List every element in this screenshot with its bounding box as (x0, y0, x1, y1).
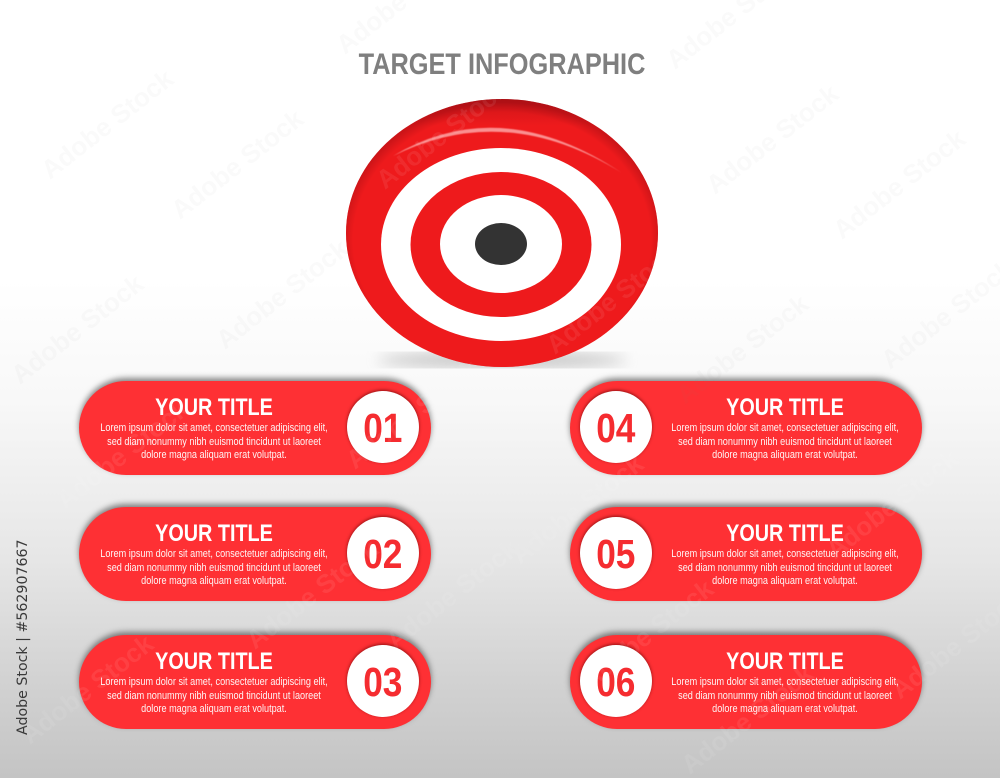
watermark: Adobe Stock (35, 63, 179, 185)
card 05 (570, 507, 922, 601)
card 02: dolore magna aliquam erat volutpat. (141, 575, 287, 587)
card 06 (570, 635, 922, 729)
card 05: dolore magna aliquam erat volutpat. (712, 575, 858, 587)
card 01: sed diam nonummy nibh euismod tincidunt ut laoreet (107, 436, 321, 448)
card 02 (79, 507, 431, 601)
watermark: Adobe Stock (370, 73, 514, 195)
card 06: Lorem ipsum dolor sit amet, consectetuer adipiscing elit, (671, 676, 899, 688)
watermark: Adobe Stock (675, 658, 819, 778)
card 06: dolore magna aliquam erat volutpat. (712, 703, 858, 715)
watermark: Adobe Stock (50, 393, 194, 515)
watermark: Adobe Stock (380, 533, 524, 655)
watermark: Adobe Stock (15, 628, 159, 750)
watermark: Adobe Stock (505, 448, 649, 570)
card 04: YOUR TITLE (726, 394, 844, 421)
card 06: 06 (596, 659, 636, 705)
card 02: 02 (363, 531, 403, 577)
card 05: Lorem ipsum dolor sit amet, consectetuer adipiscing elit, (671, 548, 899, 560)
target icon (346, 99, 658, 368)
card 04: 04 (596, 405, 636, 451)
watermark: Adobe Stock (575, 573, 719, 695)
card 02: sed diam nonummy nibh euismod tincidunt ut laoreet (107, 562, 321, 574)
card 03: sed diam nonummy nibh euismod tincidunt ut laoreet (107, 690, 321, 702)
watermark: Adobe Stock (165, 103, 309, 225)
card 03: 03 (363, 659, 403, 705)
watermark: Adobe Stock (540, 238, 684, 360)
card 06: sed diam nonummy nibh euismod tincidunt ut laoreet (678, 690, 892, 702)
watermark: Adobe Stock (5, 268, 149, 390)
watermark: Adobe Stock (210, 233, 354, 355)
card 01: dolore magna aliquam erat volutpat. (141, 449, 287, 461)
card 01 (79, 381, 431, 475)
watermark: Adobe Stock (700, 78, 844, 200)
watermark: Adobe Stock (670, 288, 814, 410)
card 06: YOUR TITLE (726, 648, 844, 675)
card 03 (79, 635, 431, 729)
title: TARGET INFOGRAPHIC (359, 48, 645, 81)
card 04: Lorem ipsum dolor sit amet, consectetuer adipiscing elit, (671, 422, 899, 434)
watermark: Adobe Stock (240, 533, 384, 655)
card 05: YOUR TITLE (726, 520, 844, 547)
card 01: YOUR TITLE (155, 394, 273, 421)
card 03: dolore magna aliquam erat volutpat. (141, 703, 287, 715)
card 03: Lorem ipsum dolor sit amet, consectetuer adipiscing elit, (100, 676, 328, 688)
watermark: Adobe Stock (827, 123, 971, 245)
card 02: Lorem ipsum dolor sit amet, consectetuer adipiscing elit, (100, 548, 328, 560)
card 04: sed diam nonummy nibh euismod tincidunt ut laoreet (678, 436, 892, 448)
card 04: dolore magna aliquam erat volutpat. (712, 449, 858, 461)
stock id label: Adobe Stock | #562907667 (15, 539, 31, 735)
card 03: YOUR TITLE (155, 648, 273, 675)
card 05: sed diam nonummy nibh euismod tincidunt ut laoreet (678, 562, 892, 574)
card 01: 01 (363, 405, 403, 451)
watermark: Adobe Stock (340, 353, 484, 475)
card 05: 05 (596, 531, 636, 577)
watermark: Adobe Stock (820, 443, 964, 565)
card 01: Lorem ipsum dolor sit amet, consectetuer adipiscing elit, (100, 422, 328, 434)
card 04 (570, 381, 922, 475)
card 02: YOUR TITLE (155, 520, 273, 547)
